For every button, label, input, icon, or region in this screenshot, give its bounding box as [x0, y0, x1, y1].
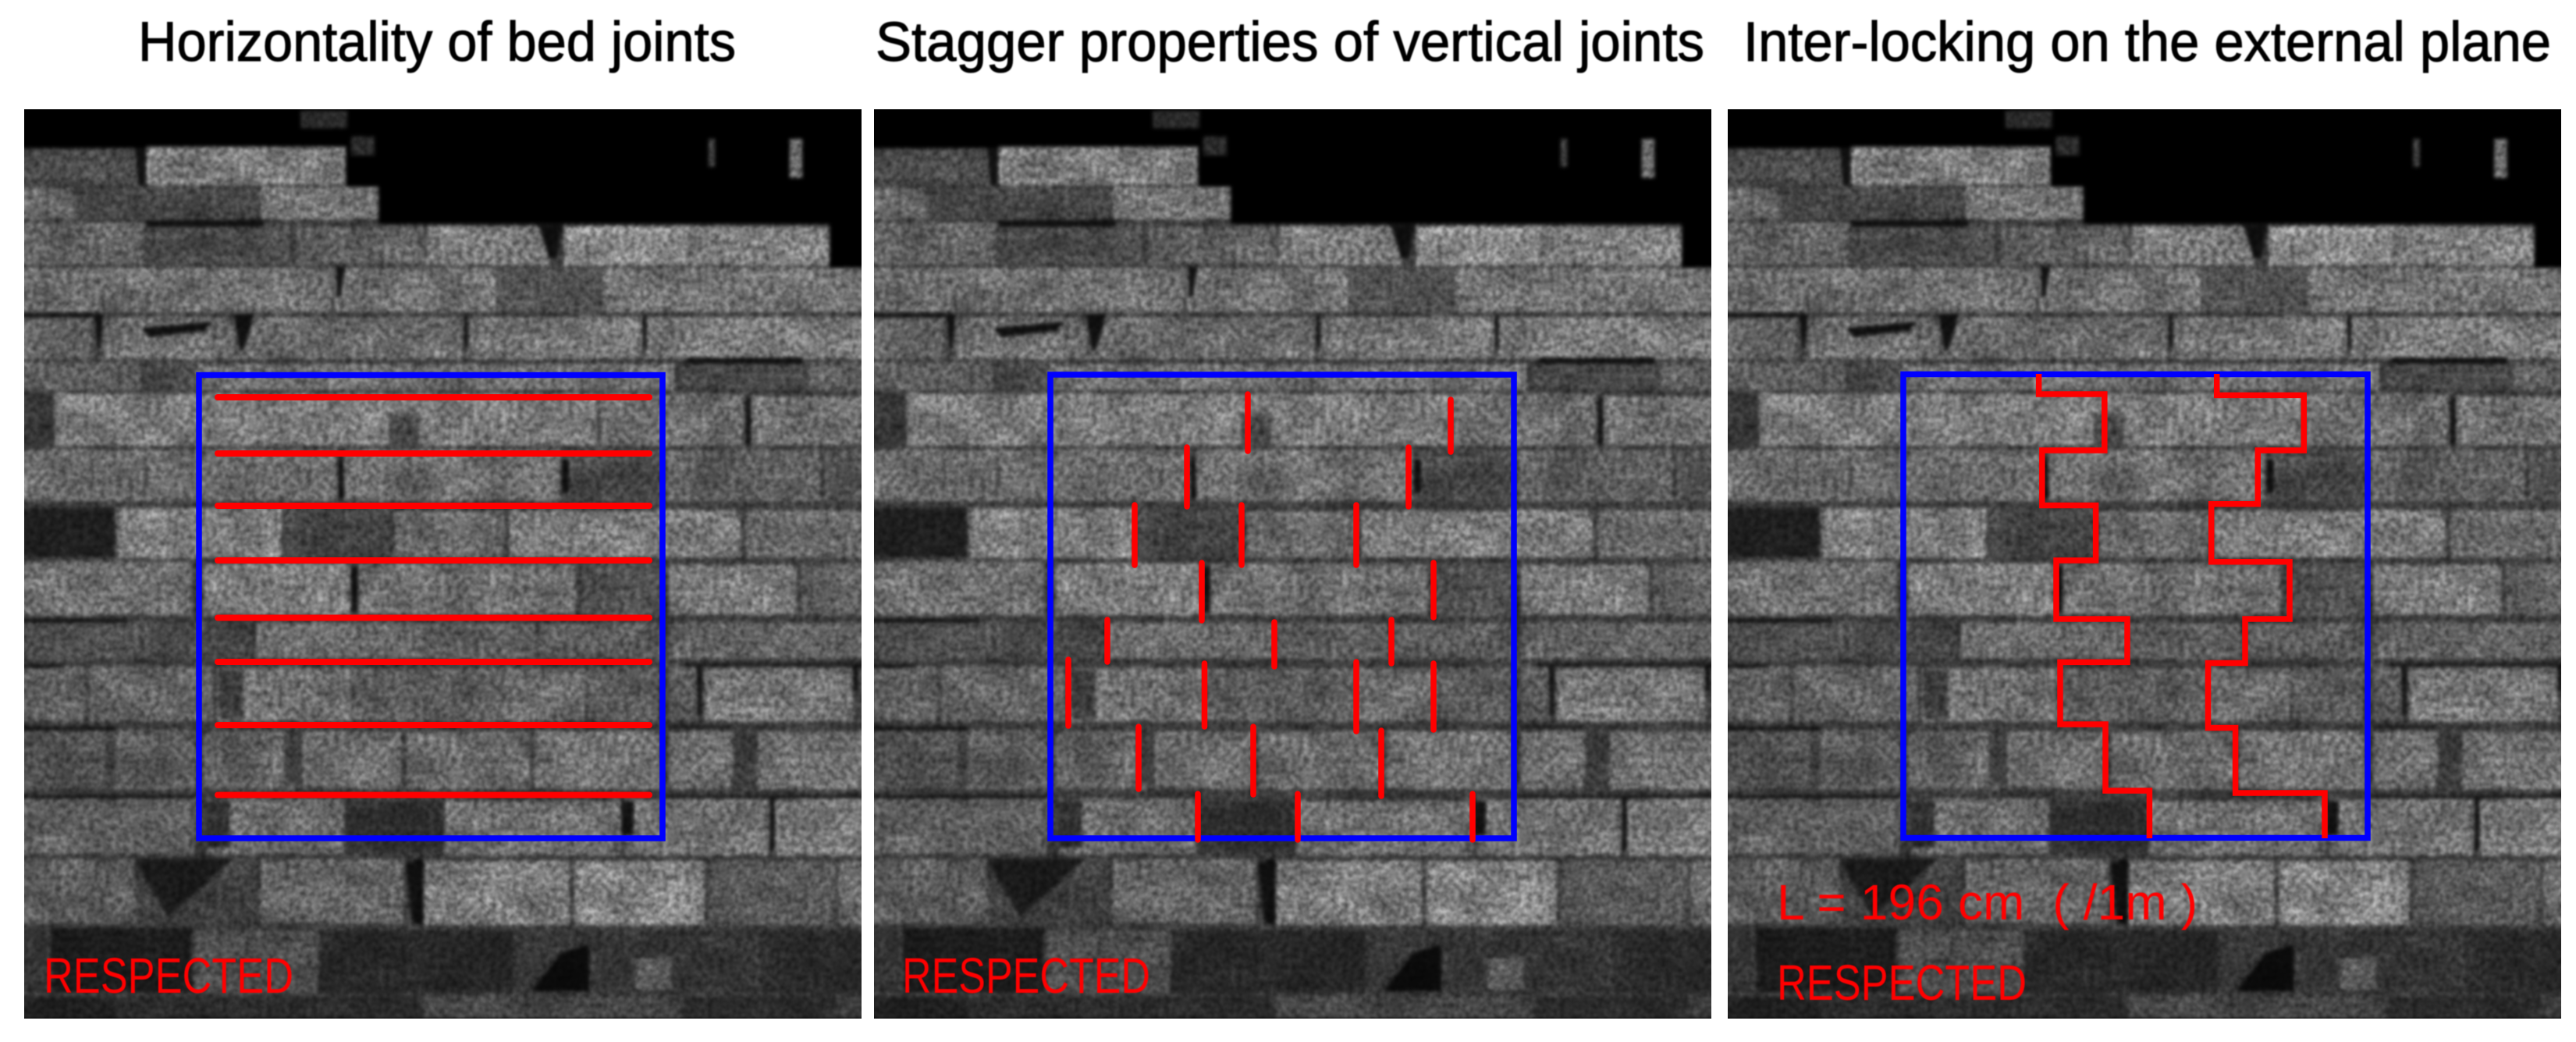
panel: stagger properties of vertical joints: [868, 109, 1726, 1019]
blue sample frame 2: [1050, 375, 1514, 838]
panel: horizontality of bed joints: [16, 109, 874, 1019]
title: horizontality of bed joints: Horizontality of bed joints: [138, 12, 736, 73]
red vertical joint lines: [1068, 394, 1473, 840]
red bed joint lines: [218, 397, 649, 795]
title: inter-locking on the external plane: Inter-locking on the external plane: [1743, 12, 2551, 73]
blue sample frame 3: [1903, 375, 2368, 838]
brick wall image 2: [868, 109, 1726, 1019]
verdict label 1: RESPECTED: [44, 948, 293, 1004]
red inter-locking paths: [2039, 374, 2325, 838]
title: stagger properties of vertical joints: Stagger properties of vertical joints: [876, 12, 1704, 73]
length measurement label: L = 196 cm ( /1m ): [1777, 874, 2198, 930]
brick wall image 1: [16, 109, 874, 1019]
blue sample frame 1: [199, 375, 663, 838]
brick wall image 3: [1720, 109, 2576, 1019]
panel: inter-locking on the external plane: [1720, 109, 2576, 1019]
verdict label 3: RESPECTED: [1777, 955, 2027, 1011]
verdict label 2: RESPECTED: [902, 948, 1150, 1004]
